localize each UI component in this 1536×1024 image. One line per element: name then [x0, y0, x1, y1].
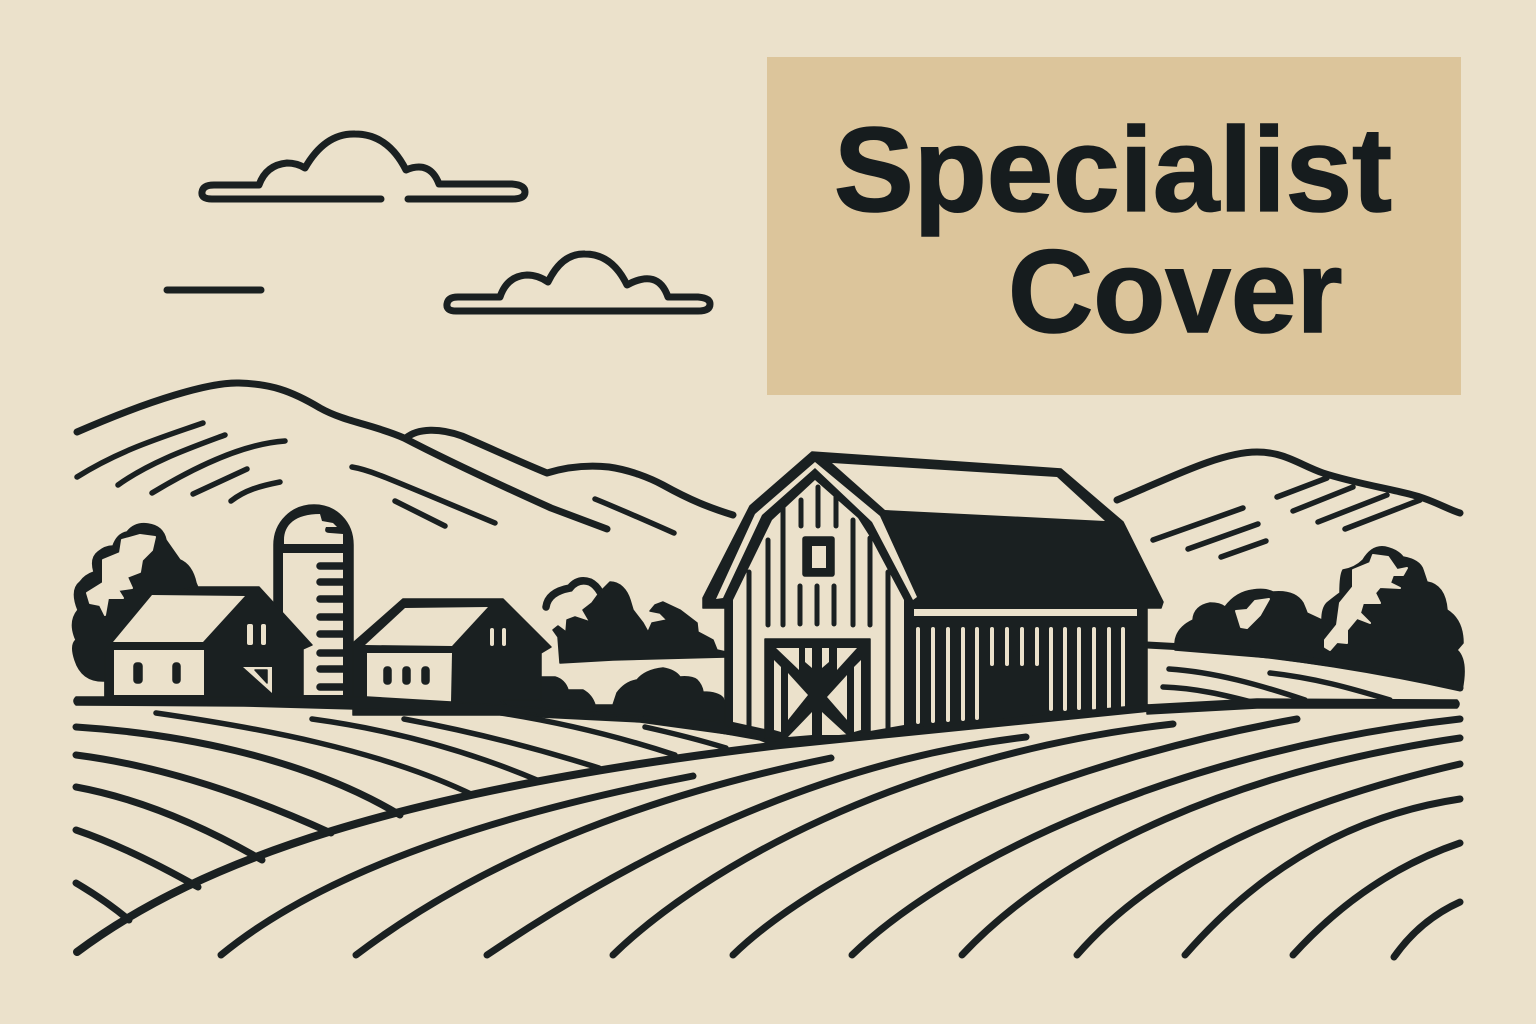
left hills [77, 383, 733, 533]
field: horizon [77, 708, 1147, 952]
bush highlight large [1325, 555, 1407, 650]
field: front furrows [221, 719, 1460, 957]
field: left furrows [76, 713, 726, 920]
tree left [72, 524, 199, 700]
barn roof light plane [832, 463, 1105, 521]
farmhouse triangle vent [243, 667, 272, 693]
barn door [765, 639, 870, 738]
bush highlight small [1236, 599, 1269, 628]
right bushes [1175, 547, 1464, 690]
barn front boards [749, 487, 888, 730]
silo [274, 505, 353, 700]
cloud: lower [447, 254, 710, 311]
title text: Specialist [834, 104, 1392, 237]
shed [353, 599, 551, 715]
right hills [1117, 452, 1460, 557]
silo ribs [320, 566, 345, 687]
barn side boards [918, 629, 1123, 722]
title panel [767, 57, 1461, 395]
barn [703, 452, 1163, 745]
middle back bushes [546, 581, 726, 663]
ground line left [74, 697, 772, 742]
cloud: upper [202, 134, 525, 199]
barn side eave stripe [914, 609, 1137, 616]
cloud: dash [167, 286, 261, 294]
middle front bushes [500, 668, 735, 735]
farmhouse wall [114, 650, 204, 695]
hay loft window [803, 537, 834, 576]
title text: Cover [1008, 226, 1342, 358]
clouds [167, 134, 710, 311]
shed roof [365, 607, 488, 646]
shed wall [367, 653, 452, 702]
gambrel trim [716, 462, 917, 600]
farmhouse roof [113, 595, 245, 642]
barn silhouette [703, 452, 1163, 745]
right back field [1147, 645, 1460, 714]
farmhouse [105, 587, 312, 700]
barn front wall [733, 480, 904, 731]
tree highlight [87, 535, 155, 615]
